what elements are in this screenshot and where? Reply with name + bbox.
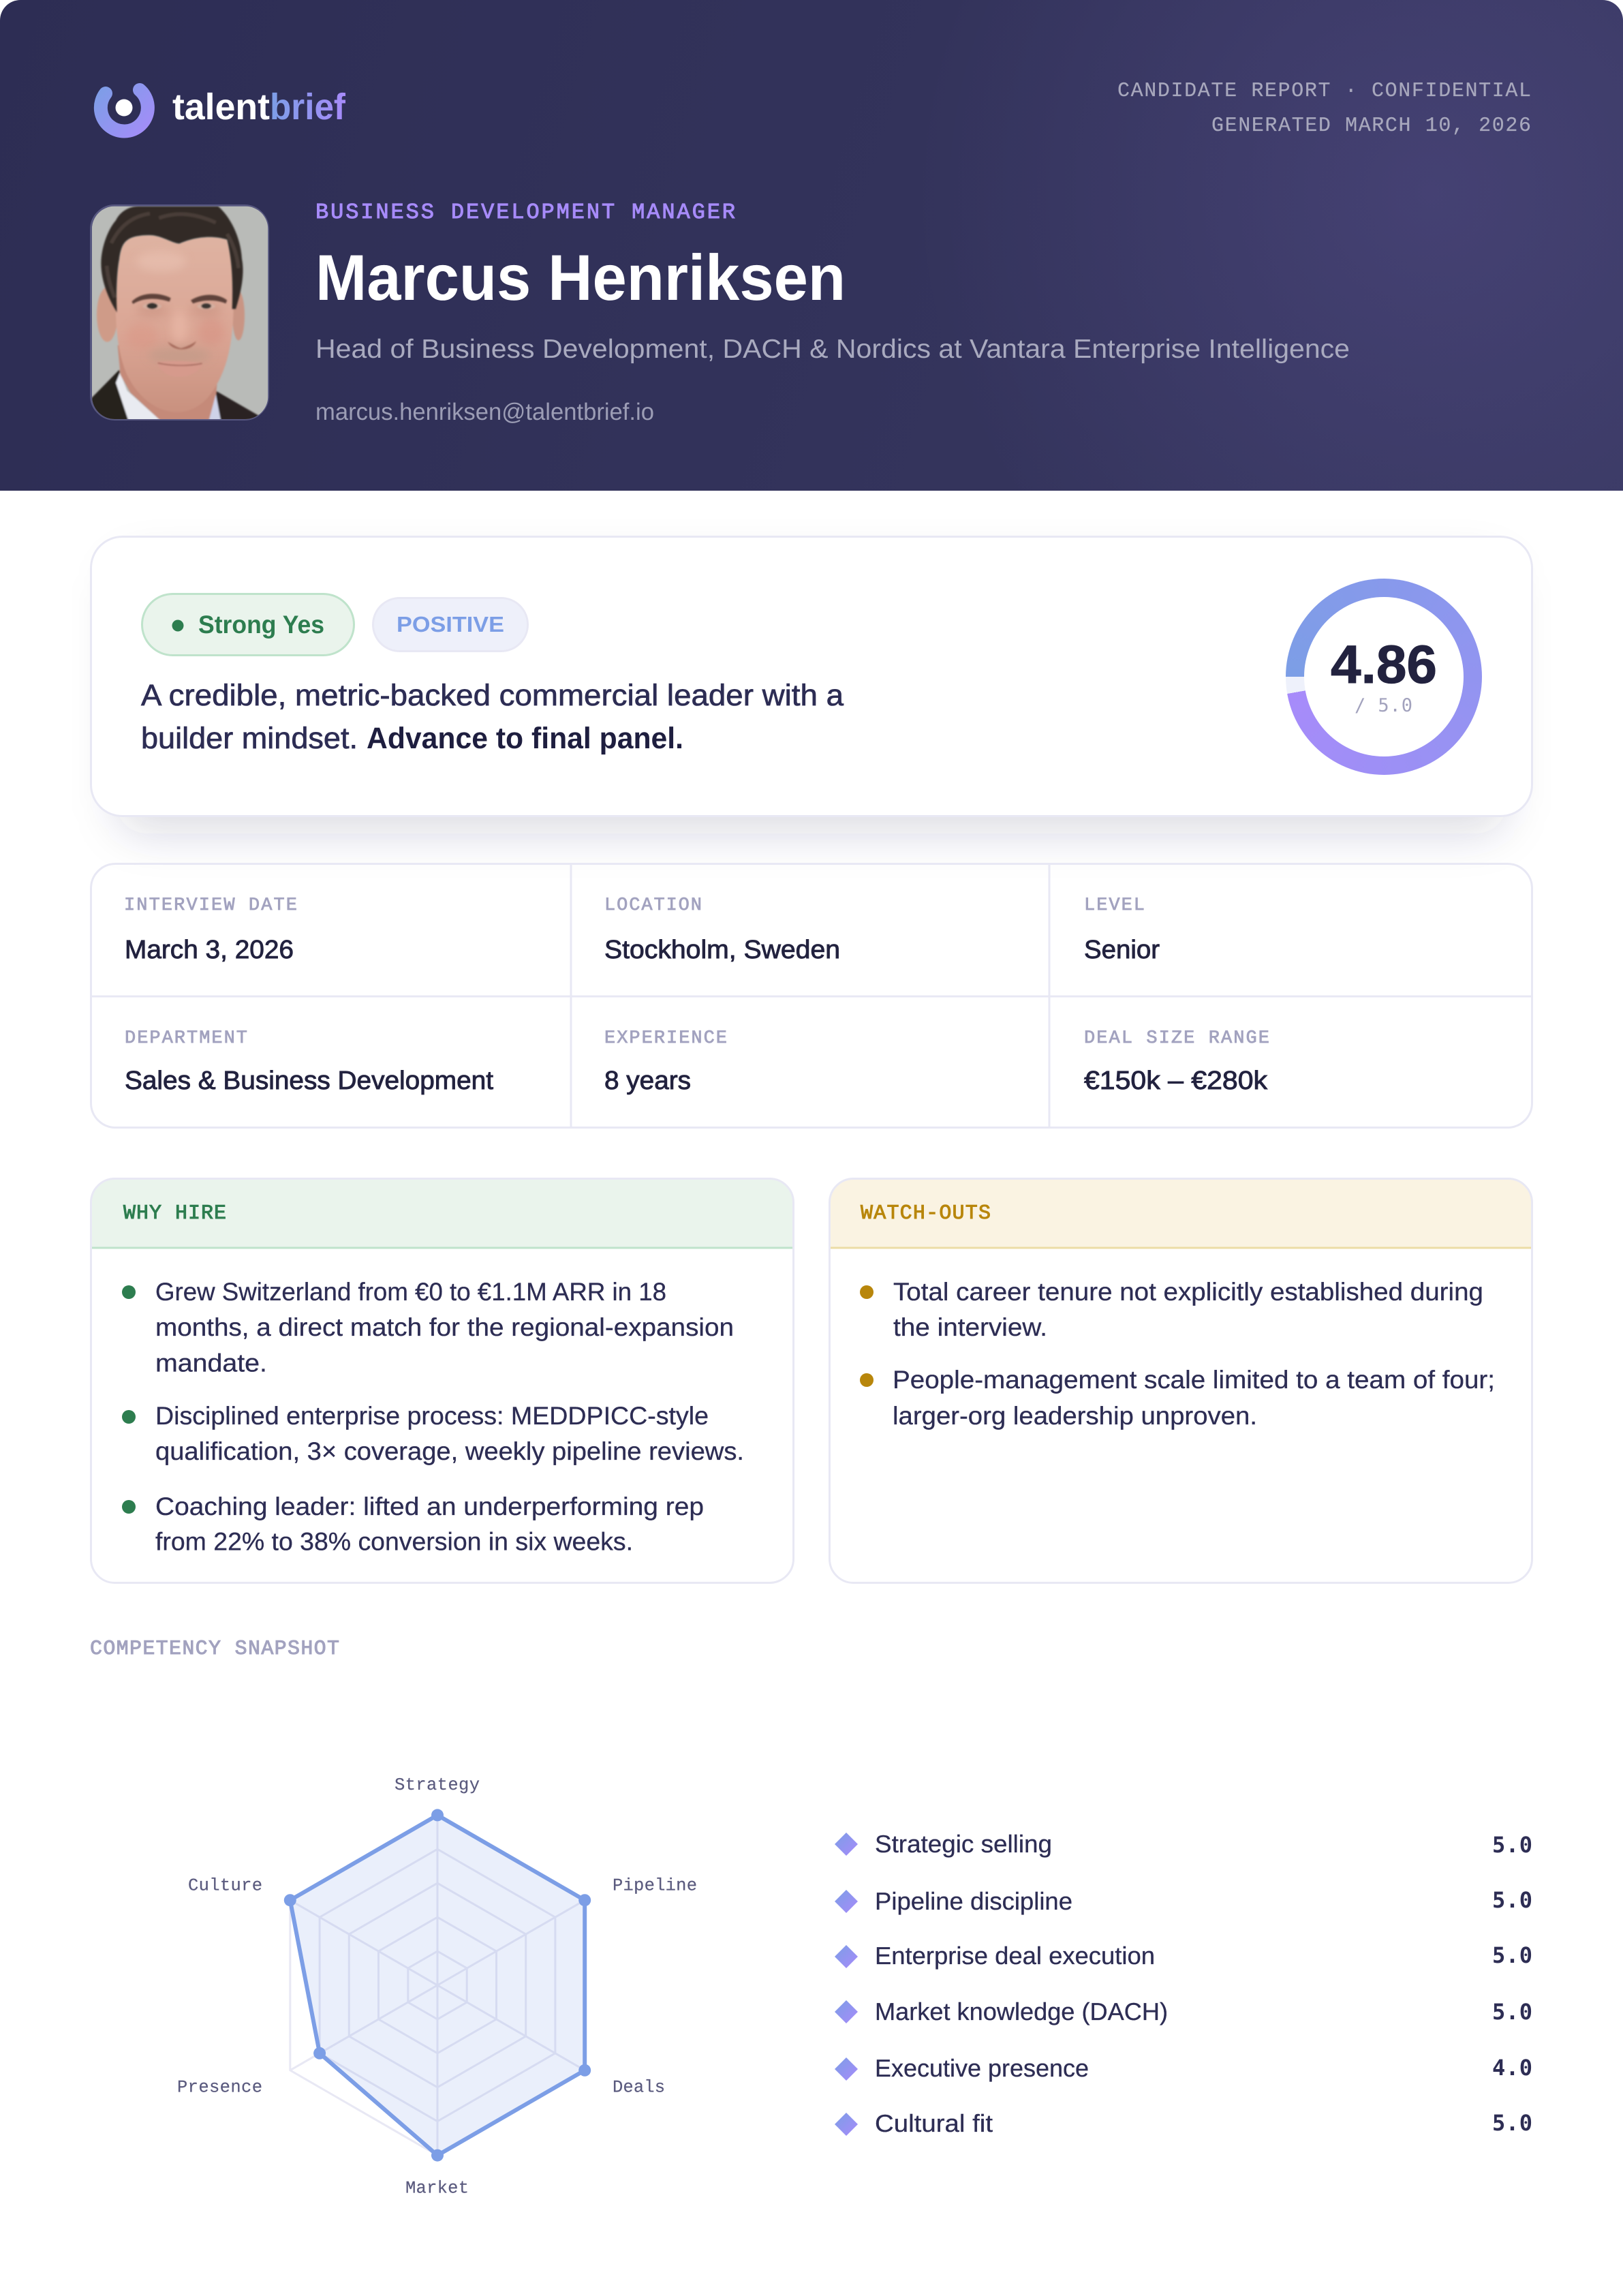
panel: verdict card	[91, 537, 1532, 833]
candidate role: BUSINESS DEVELOPMENT MANAGER	[315, 200, 735, 225]
candidate name: Marcus Henriksen	[315, 242, 846, 314]
radar axis labels: Culture	[188, 1876, 262, 1896]
candidate email: marcus.henriksen@talentbrief.io	[315, 399, 654, 425]
radar axis labels: Market	[405, 2178, 469, 2199]
candidate photo	[89, 206, 268, 420]
verdict summary: Advance to final panel.	[367, 722, 683, 755]
bullet: career tenure: Total career tenure not explicitly established during	[893, 1278, 1483, 1306]
bullet: coaching leader: Coaching leader: lifted an underperforming rep	[155, 1493, 704, 1520]
row: strategic selling: 5.0	[1492, 1832, 1532, 1858]
bullet: switzerland growth: Grew Switzerland from €0 to €1.1M ARR in 18	[155, 1278, 666, 1306]
report meta: GENERATED MARCH 10, 2026	[1211, 114, 1531, 138]
bullet: coaching leader: from 22% to 38% conversion in six weeks.	[155, 1528, 633, 1555]
detail: experience: 8 years	[604, 1067, 691, 1095]
detail: deal size range: DEAL SIZE RANGE	[1084, 1028, 1269, 1049]
bullet: switzerland growth	[122, 1278, 734, 1377]
logo: talentbrief	[101, 87, 346, 132]
detail: department: Sales & Business Development	[125, 1067, 493, 1095]
detail: location: LOCATION	[604, 896, 702, 916]
row: cultural fit: 5.0	[1492, 2110, 1532, 2136]
detail: department: DEPARTMENT	[125, 1028, 247, 1049]
row: market knowledge: 5.0	[1492, 1999, 1532, 2025]
row: cultural fit	[835, 2109, 1532, 2137]
detail: location	[604, 896, 840, 964]
detail: interview date	[124, 896, 297, 964]
bullet: career tenure: the interview.	[893, 1313, 1047, 1341]
chart: overall score ring: / 5.0	[1355, 695, 1412, 716]
detail: deal size range	[1084, 1028, 1269, 1095]
logo wordmark	[172, 87, 346, 127]
radar axis labels: Pipeline	[613, 1876, 697, 1896]
detail: level: Senior	[1084, 936, 1160, 964]
row: enterprise deal execution	[835, 1942, 1532, 1970]
candidate current position: Head of Business Development, DACH & Nordics at Vantara Enterprise Intelligence	[315, 335, 1350, 364]
bullet: enterprise process	[122, 1402, 744, 1465]
chart: overall score ring: 4.86	[1331, 634, 1437, 694]
radar data shape	[284, 1809, 591, 2162]
detail: level: LEVEL	[1084, 896, 1145, 916]
row: market knowledge: Market knowledge (DACH)	[875, 1997, 1168, 2025]
bullet: enterprise process: Disciplined enterprise process: MEDDPICC-style	[155, 1402, 709, 1430]
bullet: career tenure	[860, 1278, 1483, 1341]
bullet: coaching leader	[122, 1493, 704, 1555]
detail: location: Stockholm, Sweden	[604, 936, 840, 964]
detail: interview date: March 3, 2026	[125, 936, 294, 964]
row: cultural fit: Cultural fit	[875, 2109, 993, 2137]
competency score list	[835, 1830, 1532, 2137]
radar axis labels	[177, 1775, 697, 2199]
row: enterprise deal execution: Enterprise deal execution	[875, 1942, 1155, 1970]
radar axis labels: Deals	[613, 2077, 665, 2098]
watch-outs heading: WATCH-OUTS	[861, 1202, 991, 1225]
row: pipeline discipline: Pipeline discipline	[875, 1887, 1072, 1915]
badge: positive: POSITIVE	[397, 612, 504, 637]
panel: interview details grid	[91, 864, 1532, 1127]
detail: interview date: INTERVIEW DATE	[124, 896, 297, 916]
radar axis labels: Strategy	[395, 1775, 480, 1795]
chart: competency radar	[177, 1775, 697, 2199]
bullet: management scale: larger-org leadership unproven.	[893, 1402, 1257, 1430]
row: strategic selling: Strategic selling	[875, 1830, 1052, 1858]
bullet: switzerland growth: mandate.	[155, 1349, 267, 1377]
row: strategic selling	[835, 1830, 1532, 1858]
bullet: switzerland growth: months, a direct match for the regional-expansion	[155, 1313, 734, 1341]
why hire heading: WHY HIRE	[123, 1202, 226, 1225]
section heading: competency snapshot: COMPETENCY SNAPSHOT	[90, 1638, 339, 1661]
logo wordmark: brief	[270, 87, 346, 127]
radar axis labels: Presence	[177, 2077, 262, 2098]
verdict summary	[141, 679, 844, 755]
bullet: management scale	[860, 1366, 1495, 1430]
row: executive presence: Executive presence	[875, 2054, 1089, 2082]
detail: deal size range: €150k – €280k	[1084, 1067, 1268, 1095]
verdict summary: builder mindset.	[141, 722, 358, 755]
header band	[0, 0, 1623, 491]
icon: logo ring	[101, 90, 148, 132]
badge: strong yes	[142, 594, 354, 656]
row: pipeline discipline	[835, 1887, 1532, 1915]
row: executive presence: 4.0	[1492, 2055, 1532, 2081]
detail: department	[125, 1028, 493, 1095]
badge: positive	[373, 598, 527, 652]
verdict summary: A credible, metric-backed commercial leader with a	[141, 679, 844, 712]
bullet: management scale: People-management scale limited to a team of four;	[893, 1366, 1495, 1394]
row: executive presence	[835, 2054, 1532, 2082]
report meta	[1117, 80, 1531, 138]
row: market knowledge	[835, 1997, 1532, 2025]
report meta: CANDIDATE REPORT · CONFIDENTIAL	[1117, 80, 1531, 103]
panel: watch-outs	[830, 1179, 1532, 1582]
detail: experience	[604, 1028, 727, 1095]
logo wordmark: talent	[172, 87, 270, 127]
bullet: enterprise process: qualification, 3× coverage, weekly pipeline reviews.	[155, 1437, 744, 1465]
panel: why hire	[91, 1179, 793, 1582]
detail: level	[1084, 896, 1160, 964]
row: enterprise deal execution: 5.0	[1492, 1942, 1532, 1968]
chart: overall score ring	[1286, 579, 1482, 775]
badge: strong yes: Strong Yes	[198, 611, 324, 639]
row: pipeline discipline: 5.0	[1492, 1887, 1532, 1913]
detail: experience: EXPERIENCE	[604, 1028, 727, 1049]
